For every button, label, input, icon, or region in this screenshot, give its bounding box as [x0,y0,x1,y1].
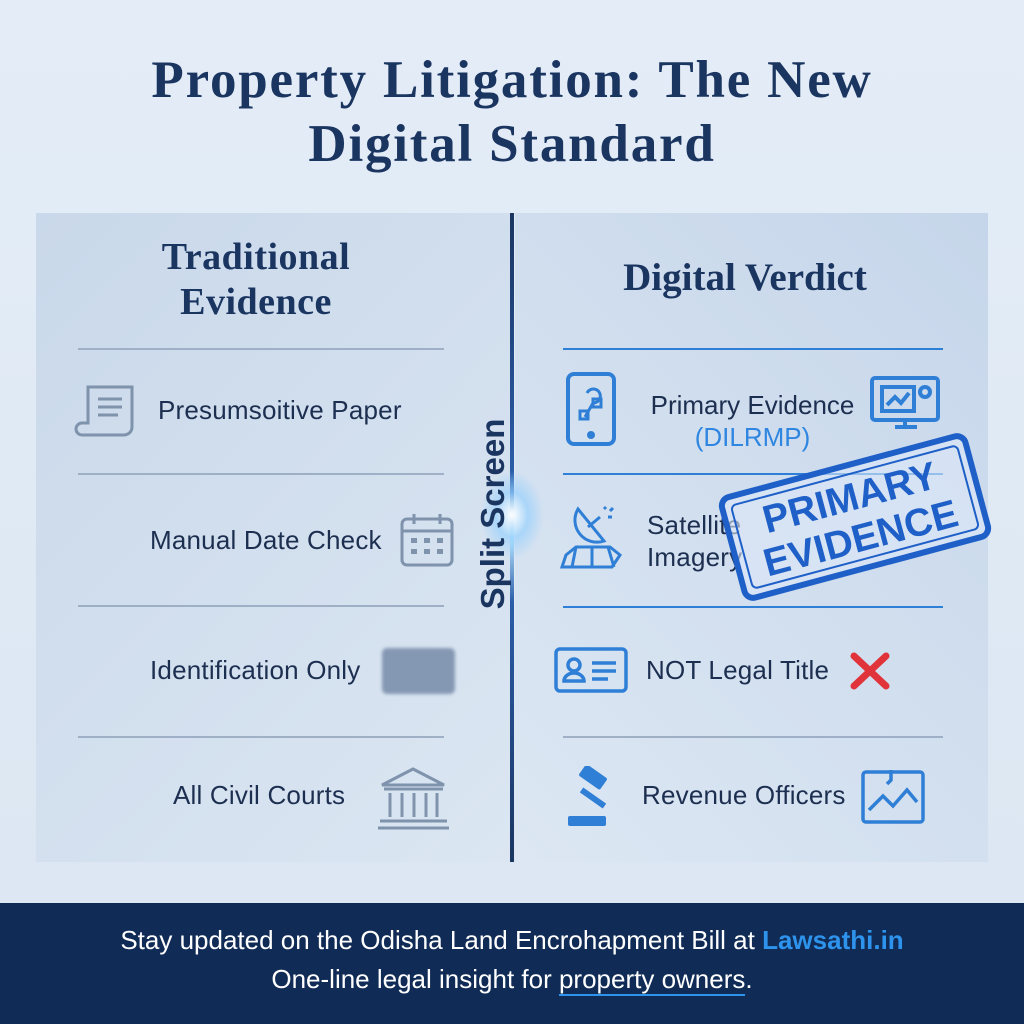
title: Property Litigation: The New [151,51,873,109]
text: split screen vertical: Split Screen [474,419,511,609]
stamp: primary evidence [716,430,994,604]
icon: courthouse [378,767,449,830]
text: satellite imagery: Satellite [647,510,741,540]
panel: digital verdict [515,213,988,862]
text: satellite imagery: Imagery [647,542,742,572]
panel: traditional evidence [36,213,510,862]
heading: digital verdict: Digital Verdict [623,256,867,299]
footer banner [0,903,1024,1024]
text: not legal title: NOT Legal Title [646,655,829,685]
icon: id card [554,647,628,693]
title [151,51,873,173]
stamp: primary evidence: EVIDENCE [759,492,963,585]
text: primary evidence DILRMP: (DILRMP) [695,422,810,452]
heading: traditional: Evidence [180,281,332,323]
text: all civil courts: All Civil Courts [173,780,345,810]
icon: monitor [870,376,940,429]
title: Digital Standard [308,115,716,173]
text: primary evidence DILRMP [651,390,854,452]
text: primary evidence DILRMP: Primary Evidence [651,390,854,420]
icon: red x [850,652,890,690]
heading: traditional: Traditional [162,236,350,278]
divider: split line [510,213,514,862]
text: satellite imagery [647,510,742,572]
icon: tablet [566,372,616,446]
text: revenue officers: Revenue Officers [642,780,846,810]
heading: traditional [162,236,350,323]
icon: gavel [568,766,608,826]
footer text line 2: One-line legal insight for property owners. [271,964,753,994]
icon: satellite dish [560,506,622,568]
footer text line 1: Stay updated on the Odisha Land Encrohapment Bill at Lawsathi.in [120,925,904,955]
icon: blurred card [382,648,455,694]
text: presumsoitive paper: Presumsoitive Paper [158,395,402,425]
text: manual date check: Manual Date Check [150,525,382,555]
glow [480,470,544,560]
stamp: primary evidence: PRIMARY [758,454,942,542]
icon: map image [861,770,925,824]
text: identification only: Identification Only [150,655,360,685]
icon: calendar [400,514,454,566]
icon: scroll [74,386,134,436]
